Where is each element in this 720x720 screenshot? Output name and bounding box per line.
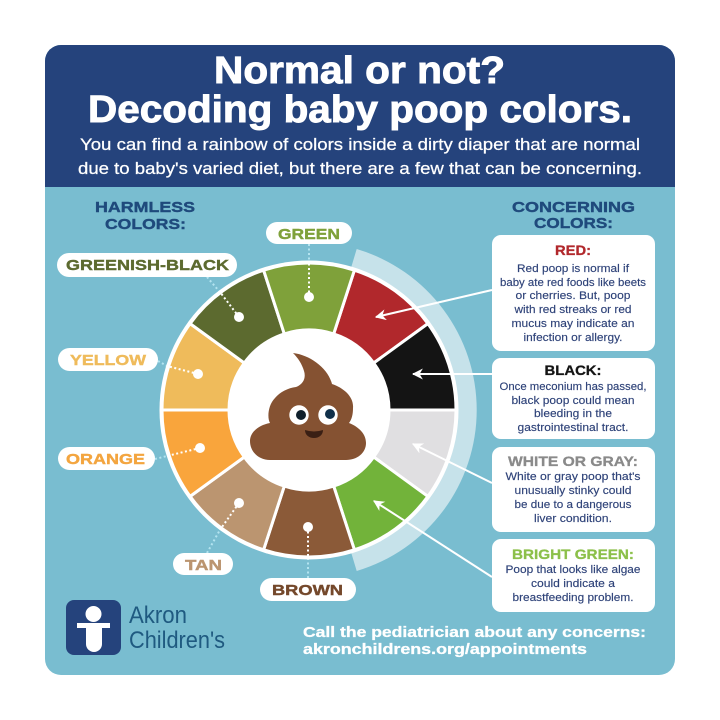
body text: black: gastrointestinal tract.	[518, 422, 628, 434]
pill: brown: BROWN	[272, 582, 343, 599]
call to action	[303, 624, 646, 658]
subtitle: You can find a rainbow of colors inside a dirty diaper that are normal	[80, 135, 640, 154]
card: black	[492, 358, 655, 439]
body text: white or gray: be due to a dangerous	[514, 499, 632, 511]
color wheel	[160, 260, 458, 560]
wheel dots and dotted leaders	[167, 264, 314, 556]
pill: orange: ORANGE	[66, 451, 145, 468]
body text: bright green	[506, 564, 640, 604]
body text: bright green: Poop that looks like algae	[506, 564, 640, 576]
segment: bright green	[334, 457, 428, 550]
segment: white or gray	[374, 410, 456, 496]
arrows to concerning boxes	[374, 290, 492, 577]
heading: harmless colors: COLORS:	[105, 216, 186, 233]
subtitle: due to baby's varied diet, but there are a few that can be concerning.	[78, 159, 642, 178]
body text: white or gray: unusually stinky could	[514, 485, 632, 497]
body text: red: Red poop is normal if	[517, 263, 630, 275]
arrow: bright green	[374, 501, 492, 577]
body text: white or gray: liver condition.	[534, 513, 612, 525]
body text: black: black poop could mean	[512, 395, 634, 407]
wordmark: Children's	[129, 627, 225, 654]
arrow: red	[376, 290, 492, 317]
infographic	[45, 45, 675, 675]
title: Normal or not?	[214, 50, 505, 92]
pill: greenish-black: GREENISH-BLACK	[66, 257, 229, 274]
body text: red: with red streaks or red	[513, 304, 632, 316]
card: red	[492, 235, 655, 351]
body text: red: baby ate red foods like beets	[500, 277, 647, 289]
body text: red: infection or allergy.	[524, 332, 622, 344]
title: Decoding baby poop colors.	[88, 89, 632, 131]
pill: tan: TAN	[185, 557, 222, 574]
call to action: akronchildrens.org/appointments	[303, 641, 587, 658]
body text: black	[500, 381, 646, 434]
label connectors outside wheel	[155, 244, 309, 578]
card: white or gray	[492, 447, 655, 532]
card: black: BLACK:	[544, 362, 602, 378]
title	[88, 50, 632, 131]
body text: bright green: breastfeeding problem.	[512, 592, 634, 604]
body text: red: mucus may indicate an	[512, 318, 634, 330]
heading: harmless colors	[95, 199, 195, 233]
pill: orange	[58, 447, 155, 470]
body text: bright green: could indicate a	[531, 578, 616, 590]
segment: yellow	[162, 324, 244, 410]
body text: red	[500, 263, 647, 344]
call to action: Call the pediatrician about any concerns:	[303, 624, 646, 641]
heading: concerning colors: CONCERNING	[512, 199, 635, 216]
wordmark: Akron	[129, 602, 187, 629]
segment: red	[334, 270, 428, 363]
heading: harmless colors: HARMLESS	[95, 199, 195, 216]
arrow: black	[413, 373, 492, 375]
wordmark	[129, 602, 225, 654]
body text: white or gray: White or gray poop that's	[506, 471, 641, 483]
arrow: white or gray	[413, 444, 492, 483]
logo: Akron Children's	[66, 600, 225, 655]
concerning colors arc band	[351, 249, 477, 571]
segment: brown	[264, 486, 354, 557]
subtitle	[78, 135, 642, 178]
panel: header band	[45, 45, 675, 187]
segment: tan	[190, 457, 284, 550]
pill: yellow	[58, 348, 158, 371]
card: white or gray: WHITE OR GRAY:	[508, 453, 638, 469]
panel: background	[45, 45, 675, 675]
body text: red: or cherries. But, poop	[516, 290, 630, 302]
segment: green	[264, 263, 354, 334]
body text: black: bleeding in the	[534, 408, 612, 420]
pill: green: GREEN	[278, 226, 340, 243]
pill: greenish-black	[57, 253, 237, 277]
segment: greenish-black	[190, 270, 284, 363]
pill: tan	[173, 553, 233, 575]
heading: concerning colors: COLORS:	[534, 215, 613, 232]
pill: green	[266, 222, 352, 244]
body text: white or gray	[506, 471, 641, 525]
card: bright green	[492, 539, 655, 612]
segment: black	[374, 324, 456, 410]
card: red: RED:	[555, 242, 591, 258]
segment: orange	[162, 410, 244, 496]
card: bright green: BRIGHT GREEN:	[512, 546, 634, 562]
pill: yellow: YELLOW	[70, 352, 147, 369]
pill: brown	[260, 578, 356, 601]
icon: smiling poop	[250, 353, 366, 460]
icon: logo mark	[66, 600, 121, 655]
body text: black: Once meconium has passed,	[500, 381, 646, 393]
heading: concerning colors	[512, 199, 635, 232]
